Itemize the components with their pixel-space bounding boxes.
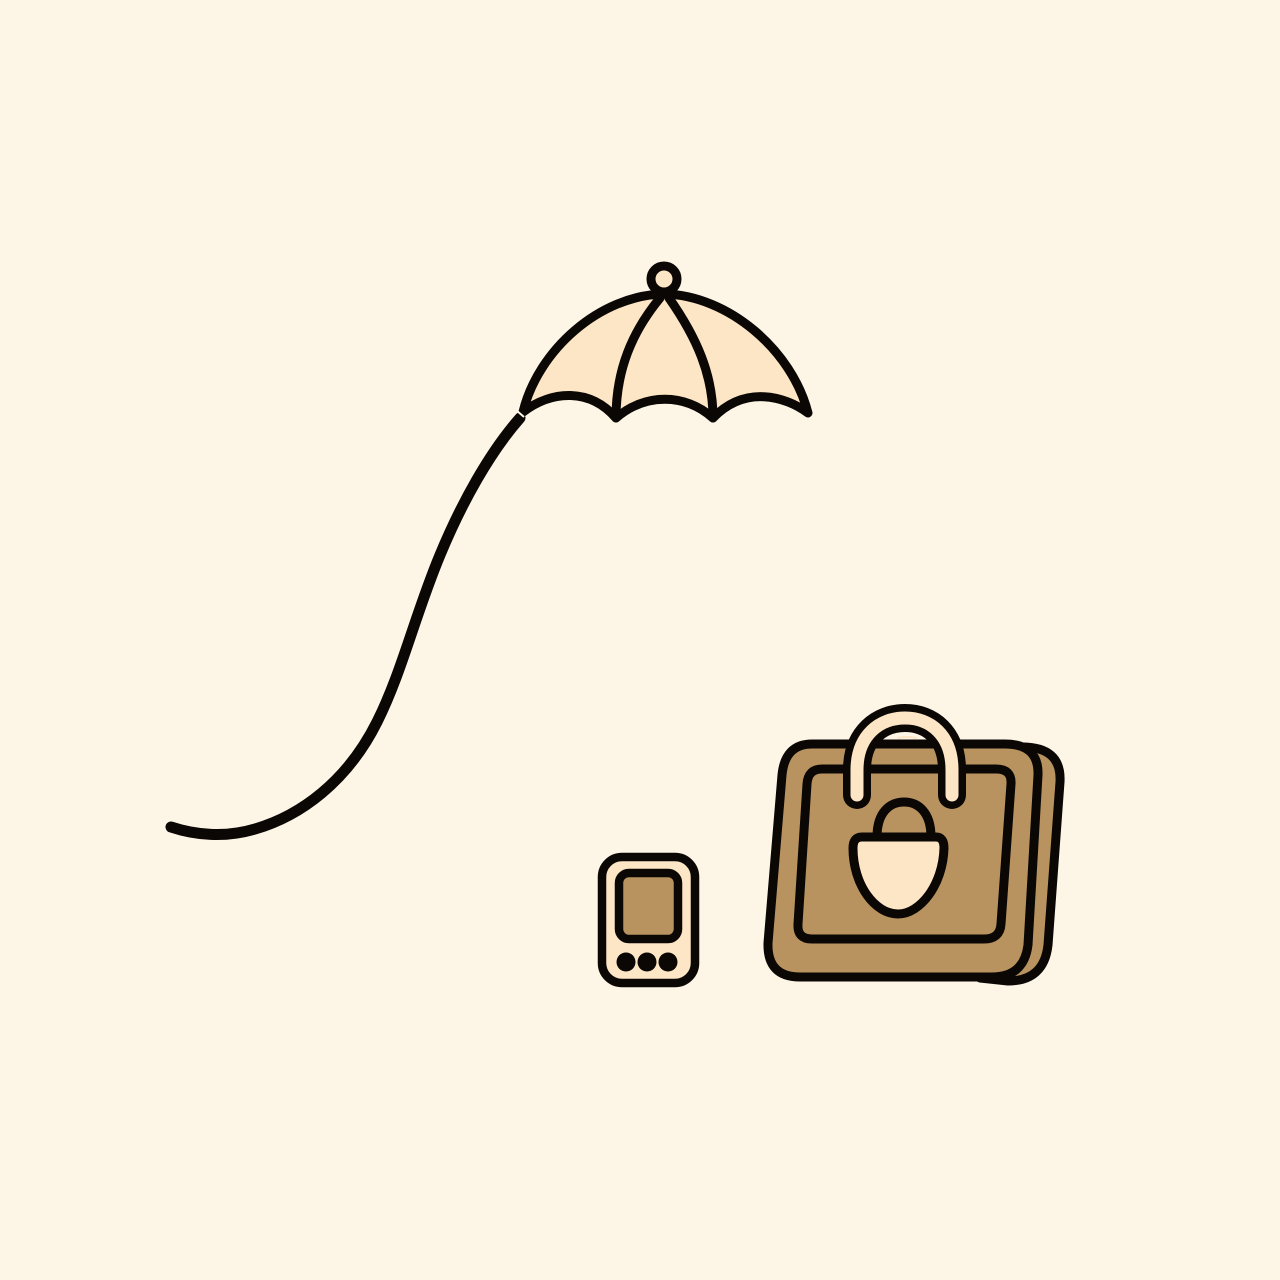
device buttons — [616, 952, 678, 972]
umbrella top ring — [651, 266, 677, 292]
umbrella — [523, 266, 808, 418]
handle inner highlight — [898, 737, 916, 738]
lock body — [853, 837, 944, 914]
device body — [602, 857, 695, 983]
bag front panel — [768, 744, 1038, 977]
bag back panel — [980, 747, 1060, 981]
bag inner panel — [798, 769, 1011, 939]
bag handle outline — [857, 718, 952, 795]
bag with lock icon — [768, 718, 1060, 981]
handle joint highlight — [516, 410, 524, 417]
lock shackle — [877, 802, 931, 837]
device screen — [619, 873, 678, 939]
curved umbrella handle — [171, 418, 520, 835]
umbrella ribs — [616, 298, 713, 418]
handheld device icon — [602, 857, 695, 983]
umbrella canopy — [523, 294, 808, 418]
bag handle fill — [857, 718, 952, 795]
